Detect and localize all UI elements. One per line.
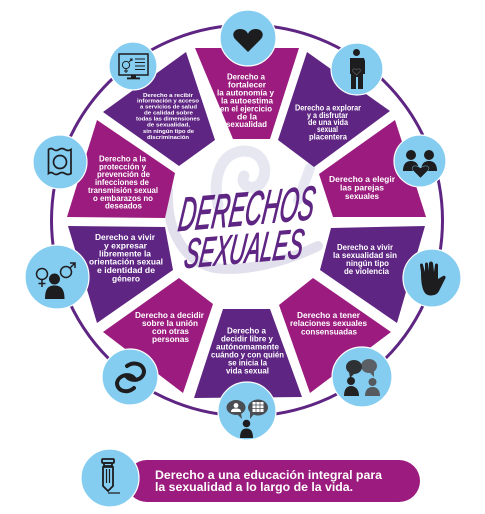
panel: autonomy: de la: [237, 112, 258, 122]
panel: when to start: cuándo y con quién: [211, 351, 284, 360]
icon: person with gender symbols: [25, 245, 89, 309]
panel: information: a servicios de salud: [140, 105, 197, 111]
panel: protection: infecciones de: [95, 178, 150, 187]
panel: pleasure: Derecho a explorar: [295, 104, 361, 112]
icon: couple with heart: [394, 135, 446, 187]
panel: autonomy: en el ejercicio: [220, 104, 272, 114]
icon: hand: [403, 249, 461, 307]
panel: protection: protección y: [99, 162, 147, 172]
panel: autonomy: la autonomía y: [217, 88, 275, 98]
panel: when to start: Derecho a: [227, 327, 267, 336]
panel: autonomy: Derecho a: [227, 72, 266, 82]
panel: union: con otras: [152, 327, 190, 336]
panel: orientation: libremente la: [99, 250, 152, 258]
panel: consensual: consensuadas: [301, 328, 358, 336]
banner bar: [126, 460, 420, 502]
panel: protection: o embarazos no: [93, 194, 153, 203]
panel: information: sin ningún tipo de: [143, 129, 195, 135]
icon: heart: [220, 10, 276, 66]
panel: when to start: vida sexual: [226, 367, 269, 376]
icon: person with heart: [331, 43, 383, 95]
panel: choose partners: sexuales: [345, 192, 380, 201]
outer ring: [52, 25, 442, 416]
panel: information: Derecho a recibir: [143, 93, 194, 99]
panel: information: de sexualidad,: [147, 123, 190, 129]
banner text: la sexualidad a lo largo de la vida.: [155, 480, 353, 494]
panel: orientation: Derecho a vivir: [95, 233, 155, 242]
panel: information: de calidad sobre: [144, 111, 194, 117]
panel: union: personas: [152, 335, 190, 344]
panel: protection: Derecho a la: [99, 154, 147, 164]
panel: consensual: Derecho a tener: [297, 311, 360, 320]
panel: when to start: se inicia la: [228, 359, 268, 368]
panel: choose partners: las parejas: [340, 184, 385, 192]
panel: information: todas las dimensiones: [136, 117, 201, 123]
panel: union: [103, 278, 213, 393]
banner: comprehensive education: [81, 449, 420, 507]
panel: no violence: Derecho a vivir: [337, 243, 393, 252]
icon: person with calendar speech bubbles: [218, 382, 276, 440]
panel: protection: transmisión sexual: [88, 186, 158, 195]
panel: orientation: e identidad de: [97, 266, 156, 275]
panel: autonomy: sexualidad: [226, 120, 267, 129]
panel: consensual: [279, 278, 391, 393]
panel: no violence: ningún tipo: [346, 259, 389, 268]
banner text: Derecho a una educación integral para: [155, 468, 382, 482]
panel: union: sobre la unión: [142, 319, 198, 328]
background spiral: [168, 151, 318, 269]
title: SEXUALES: [182, 219, 307, 277]
panel: information: discriminación: [147, 135, 189, 141]
banner text: [155, 468, 382, 494]
icon: condom package: [33, 135, 87, 189]
panel: when to start: decidir libre y: [221, 335, 274, 344]
icon: pencil: [81, 449, 139, 507]
panel: no violence: [320, 226, 425, 323]
panel: when to start: [194, 309, 302, 398]
panel: orientation: género: [112, 274, 140, 284]
panel: autonomy: la autoestima: [221, 96, 274, 106]
panel: autonomy: fortalecer: [228, 80, 266, 90]
panel: union: Derecho a decidir: [135, 311, 204, 320]
panel: autonomy: [195, 48, 299, 139]
panel: pleasure: y a disfrutar: [307, 111, 348, 120]
panel: pleasure: [278, 52, 390, 167]
icon: monitor with gender symbol: [109, 42, 157, 90]
panel: protection: [67, 120, 175, 218]
title: [175, 177, 319, 277]
panel: pleasure: sexual: [317, 125, 338, 134]
panel: no violence: la sexualidad sin: [333, 251, 397, 260]
panel: choose partners: Derecho a elegir: [329, 175, 395, 184]
icon: people talking: [332, 347, 392, 407]
panel: orientation: y expresar: [104, 242, 147, 250]
panel: protection: prevención de: [97, 170, 151, 179]
panel: consensual: relaciones sexuales: [290, 319, 368, 328]
panel: information: [103, 52, 215, 166]
panel: pleasure: de una vida: [308, 118, 349, 127]
panel: information: información y acceso: [137, 99, 199, 105]
panel: choose partners: [319, 120, 426, 217]
panel: no violence: de violencia: [344, 267, 390, 276]
title: DERECHOS: [175, 177, 319, 242]
panel: pleasure: placentera: [309, 132, 348, 142]
panel: orientation: [68, 226, 173, 323]
panel: orientation: orientación sexual: [89, 258, 163, 267]
panel: when to start: autónomamente: [216, 343, 280, 352]
icon: interlinked chain: [102, 349, 158, 405]
panel: protection: deseados: [105, 202, 143, 210]
